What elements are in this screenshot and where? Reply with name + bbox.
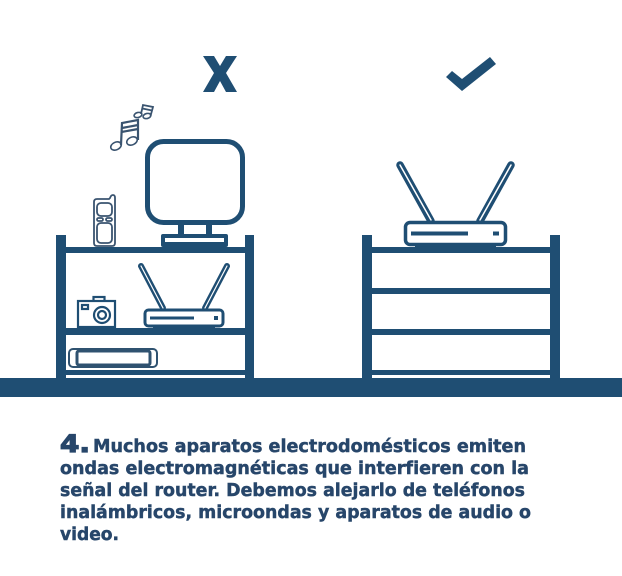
text block: recommendation 4: inalámbricos, microondas y aparatos de audio o xyxy=(60,502,531,523)
icon: television xyxy=(148,142,242,247)
icon: router on top of shelf xyxy=(400,165,511,247)
text block: recommendation 4: 4. xyxy=(60,430,90,458)
icon: wrong X mark xyxy=(203,56,237,92)
icon: video player xyxy=(69,349,157,367)
text block: recommendation 4: video. xyxy=(60,524,119,545)
text block: recommendation 4: señal del router. Debemos alejarlo de teléfonos xyxy=(60,480,525,501)
text block: recommendation 4 xyxy=(60,430,531,545)
left shelf xyxy=(56,235,254,380)
text block: recommendation 4: ondas electromagnéticas que interfieren con la xyxy=(60,458,529,479)
icon: camera xyxy=(78,297,115,327)
floor xyxy=(0,378,622,397)
icon: router on shelf xyxy=(141,266,227,328)
right shelf xyxy=(362,235,560,380)
icon: cordless phone xyxy=(94,195,115,246)
text block: recommendation 4: Muchos aparatos electrodomésticos emiten xyxy=(93,436,526,457)
icon: correct check mark xyxy=(446,57,496,91)
icon: music notes xyxy=(109,105,153,152)
